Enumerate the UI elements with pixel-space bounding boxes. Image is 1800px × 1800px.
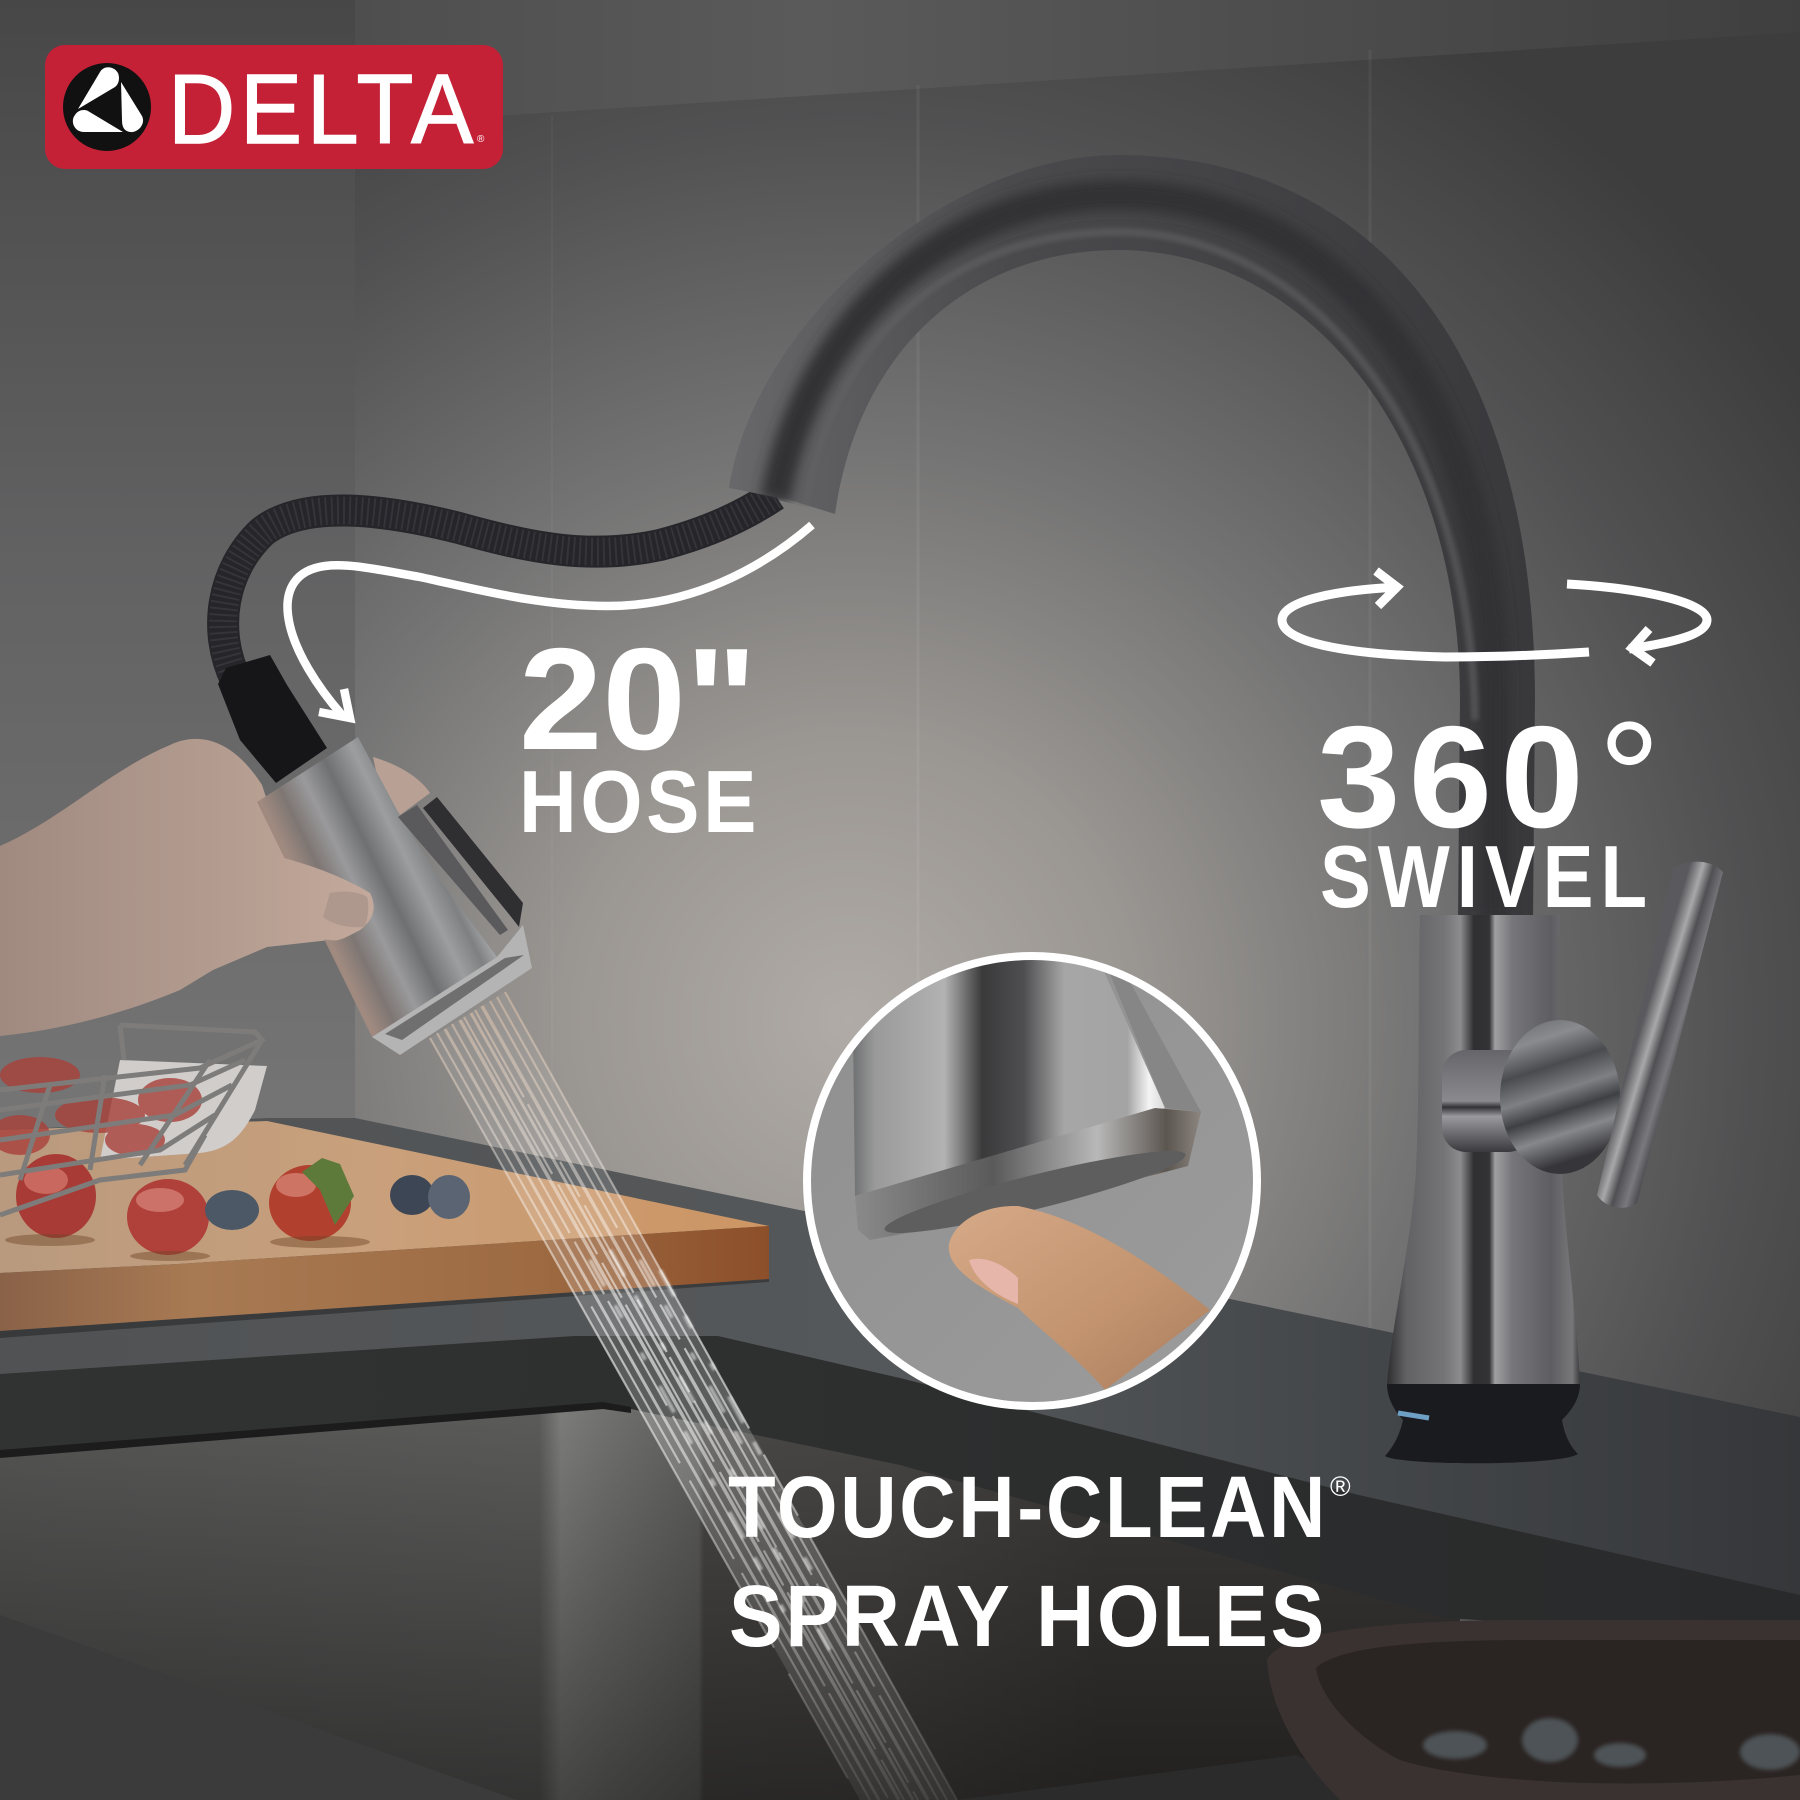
touch-clean label: SPRAY HOLES bbox=[729, 1568, 1327, 1665]
handle lever bbox=[1597, 862, 1723, 1208]
sink basin bbox=[0, 1400, 1460, 1800]
360 swivel label: ° bbox=[1598, 690, 1661, 865]
360 swivel label: 360 bbox=[1317, 696, 1592, 858]
sprayer side facet bbox=[1110, 974, 1201, 1112]
blurred bowl in foreground bbox=[1267, 1620, 1800, 1800]
blueberries bbox=[205, 1175, 470, 1230]
fingernail bbox=[969, 1259, 1018, 1304]
finger bbox=[949, 1206, 1210, 1390]
Delta logo bbox=[45, 45, 503, 169]
handle ball bbox=[1500, 1020, 1620, 1174]
shadows under fruit bbox=[5, 1234, 370, 1261]
fruit on the board bbox=[5, 1060, 470, 1261]
faucet spout bbox=[729, 155, 1535, 920]
back finger bbox=[373, 757, 430, 815]
swivel arrows bbox=[1282, 571, 1707, 663]
360 swivel label bbox=[1317, 690, 1661, 926]
sprayer close-up bbox=[852, 940, 1165, 1196]
countertop bbox=[0, 1118, 1800, 1640]
faucet base body bbox=[1385, 862, 1723, 1463]
20 inch label: 20" bbox=[519, 618, 757, 780]
pull-down sprayer head bbox=[100, 655, 532, 1055]
handle hub bbox=[1442, 1050, 1532, 1152]
black collar bbox=[218, 655, 327, 783]
logo wordmark: DELTA bbox=[168, 54, 478, 164]
touch-clean label: ® bbox=[1330, 1471, 1351, 1502]
touch-clean label bbox=[728, 1459, 1351, 1665]
sprayer buttons bbox=[398, 805, 508, 935]
white bowl behind basket bbox=[100, 1060, 267, 1160]
20 inch label: HOSE bbox=[519, 752, 760, 851]
nozzle band bbox=[372, 925, 532, 1055]
logo emblem bbox=[63, 63, 151, 151]
sprayer body bbox=[257, 737, 497, 1037]
touch-clean label: TOUCH-CLEAN bbox=[728, 1459, 1328, 1556]
palm and fingers bbox=[0, 739, 330, 1036]
hand holding sprayer bbox=[0, 739, 430, 1036]
blue touch light bbox=[1398, 1413, 1429, 1418]
20 inch label bbox=[519, 618, 760, 851]
360 swivel label: SWIVEL bbox=[1320, 827, 1654, 926]
thumb bbox=[100, 846, 374, 941]
hose length arrow bbox=[287, 525, 812, 718]
strawberry middle bbox=[127, 1179, 209, 1255]
wire basket of strawberries bbox=[0, 1025, 262, 1215]
inset circle: touch-clean spray holes bbox=[807, 940, 1257, 1406]
Delta logo: ® bbox=[477, 134, 485, 145]
sprayer hose bbox=[223, 495, 775, 680]
spray face bbox=[884, 1151, 1186, 1233]
strawberry left bbox=[16, 1154, 96, 1238]
thumbnail bbox=[323, 892, 368, 927]
sprayer rim bbox=[855, 1108, 1201, 1240]
strawberry right with leaves bbox=[269, 1158, 354, 1241]
black base ring bbox=[1385, 1384, 1580, 1463]
water spray bbox=[430, 992, 957, 1800]
cutting board bbox=[0, 1121, 769, 1338]
